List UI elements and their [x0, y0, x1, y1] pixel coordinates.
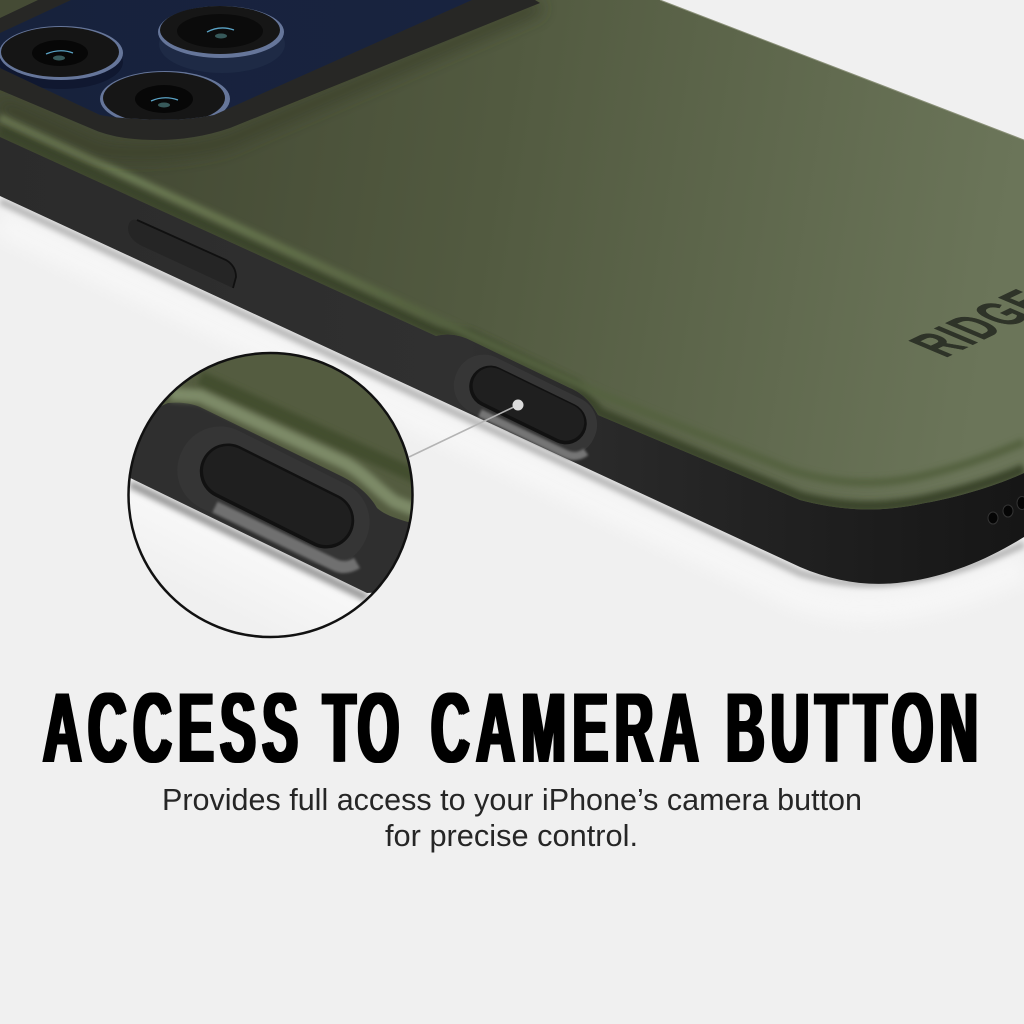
- title: ACCESS: [43, 672, 304, 783]
- phone side band: [0, 120, 1024, 584]
- description text: Provides full access to your iPhone’s camera button: [162, 782, 862, 817]
- description text: [162, 782, 862, 853]
- phone photo: [0, 0, 1024, 607]
- title: TO: [323, 672, 402, 783]
- phone shadow: [0, 201, 1024, 584]
- title: CAMERA: [431, 672, 705, 783]
- description text: for precise control.: [385, 818, 638, 853]
- soft light below phone: [0, 222, 1024, 607]
- camera lenses: [0, 6, 285, 127]
- magnified detail circle: [127, 352, 414, 638]
- speaker holes: [988, 496, 1024, 524]
- green back panel: [0, 0, 1024, 509]
- callout leader line: [409, 400, 524, 457]
- green edge highlights: [0, 117, 1024, 506]
- camera button on phone: [444, 345, 607, 465]
- camera bump frame: [0, 0, 540, 140]
- lens three: [100, 71, 230, 120]
- side volume button: [128, 220, 236, 288]
- lens one: [0, 26, 123, 89]
- title: BUTTON: [726, 672, 984, 783]
- frame shadow: [0, 6, 540, 153]
- camera plate: [0, 0, 472, 120]
- top right highlight edge: [660, 0, 1024, 140]
- title: [42, 672, 984, 783]
- lens two: [158, 6, 284, 58]
